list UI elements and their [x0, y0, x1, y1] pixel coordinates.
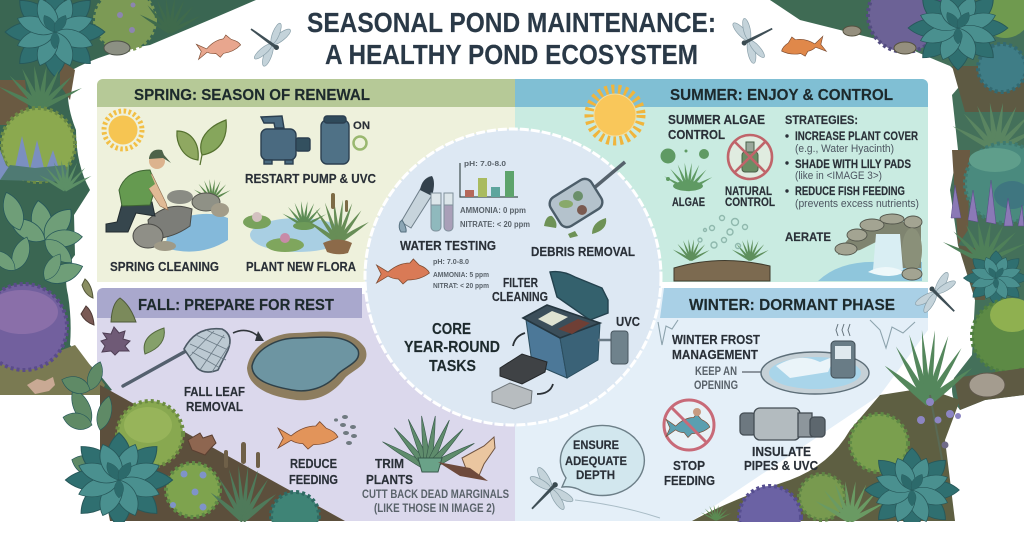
list: strategies: SHADE WITH LILY PADS: [795, 159, 911, 171]
illustration: new flora pond: [243, 193, 370, 254]
rocks: top right: [843, 26, 916, 54]
label: core year-round tasks: CORE: [432, 321, 471, 338]
title: [307, 7, 716, 70]
bush: lime right: [972, 298, 1024, 372]
lavender spikes: [0, 136, 70, 182]
label: core year-round tasks: [404, 321, 500, 375]
panel: core year-round tasks: [365, 129, 661, 425]
reeds: [209, 442, 277, 523]
rosette: top right: [908, 0, 1008, 70]
label: plant new flora: PLANT NEW FLORA: [246, 260, 356, 274]
label: winter frost management: [672, 333, 760, 362]
label: natural control: NATURAL: [725, 186, 772, 198]
flowers: lilac: [917, 395, 961, 470]
note: cut back dead marginals: (LIKE THOSE IN IMAGE 2): [374, 501, 495, 515]
bush: teal large: [965, 143, 1024, 223]
summer header band: [515, 79, 928, 107]
list: strategies: (e.g., Water Hyacinth): [795, 143, 894, 155]
leaves: tall stalk: [59, 360, 116, 478]
fern: lower left: [38, 160, 92, 192]
icon: no feeding sign: [664, 400, 714, 450]
icon: leaf net: [123, 329, 230, 386]
icon: header leaf: [111, 298, 136, 322]
rosette: bottom left: [65, 433, 173, 527]
callout: ensure adequate depth: ENSURE: [573, 438, 619, 452]
label: restart pump: RESTART PUMP & UVC: [245, 172, 376, 186]
on indicator: ON: [353, 120, 370, 132]
label: water testing: WATER TESTING: [400, 238, 496, 253]
soil: left: [0, 345, 105, 395]
arrow: net to pond: [233, 330, 260, 338]
icon: spring sun: [104, 111, 142, 149]
icon: green leaf: [144, 328, 164, 354]
fern: bottom: [814, 481, 886, 523]
label: core year-round tasks: TASKS: [429, 358, 476, 375]
bush: purple: [0, 284, 67, 370]
chart: water readings: pH: 7.0-8.0: [464, 159, 506, 168]
label: filter cleaning: FILTER: [503, 276, 538, 290]
icon: koi and readings: AMMONIA: 5 ppm: [433, 272, 489, 279]
grass: bottom right: [883, 330, 974, 406]
fall heading: FALL: PREPARE FOR REST: [138, 297, 334, 314]
icon: right koi: [779, 31, 827, 60]
label: reduce feeding: FEEDING: [289, 473, 338, 487]
label: keep an opening: KEEP AN: [695, 366, 737, 378]
illustration: waterfall: [818, 214, 922, 281]
icon: uvc unit: [598, 331, 628, 364]
icon: left dragonfly: [237, 10, 294, 69]
label: core year-round tasks: YEAR-ROUND: [404, 339, 500, 356]
icon: dark filter sponge: [500, 354, 547, 384]
illustration: trim plants: [381, 416, 495, 481]
label: fall leaf removal: FALL LEAF: [184, 385, 245, 399]
label: summer algae control: CONTROL: [668, 128, 725, 142]
note: cut back dead marginals: CUTT BACK DEAD MARGINALS: [362, 487, 509, 501]
icon: filter box: [523, 272, 608, 378]
title: A HEALTHY POND ECOSYSTEM: [325, 39, 698, 70]
label: debris removal: DEBRIS REMOVAL: [531, 244, 635, 259]
icon: koi and readings: NITRAT: < 20 ppm: [433, 283, 489, 290]
icon: winter dragonfly: [514, 464, 576, 526]
illustration: aeration bubbles: [672, 216, 770, 281]
bush: purple bottom: [739, 486, 801, 536]
icon: right dragonfly: [730, 8, 783, 66]
label: stop feeding: FEEDING: [664, 474, 715, 488]
label: insulate pipes: [744, 445, 818, 473]
panel: fall: [97, 288, 515, 521]
winter header band: [660, 288, 928, 318]
panel: winter: [514, 288, 928, 526]
icon: left koi: [196, 33, 242, 60]
bush: green corner: [979, 0, 1024, 38]
label: reduce feeding: REDUCE: [290, 457, 337, 471]
chart: water readings: AMMONIA: 0 ppm: [460, 206, 526, 215]
callout: ensure adequate depth: DEPTH: [576, 468, 615, 482]
illustration: spring cleaning gardener: [106, 150, 231, 252]
title: SEASONAL POND MAINTENANCE:: [307, 7, 716, 38]
chart: water readings: [460, 159, 530, 229]
illustration: pond: [247, 332, 366, 400]
rosette: bottom right: [865, 448, 959, 532]
bush: teal corner: [978, 44, 1024, 92]
foliage: left border: [0, 0, 256, 395]
label: reduce feeding: [289, 457, 338, 487]
label: summer algae control: [668, 113, 765, 142]
label: fall leaf removal: REMOVAL: [186, 400, 243, 414]
arrow: filter out: [513, 333, 525, 346]
rosette: top left: [5, 0, 105, 77]
icon: orange fish and food: [278, 415, 357, 449]
label: filter cleaning: [492, 276, 548, 304]
label: aerate: AERATE: [785, 230, 831, 244]
bush: lime bottom: [850, 414, 908, 472]
icon: header dragonfly: [912, 269, 971, 328]
grass: small: [700, 505, 732, 521]
icon: light filter sponge: [492, 383, 532, 409]
icon: koi and readings: pH: 7.0-8.0: [433, 259, 469, 266]
label: trim plants: [366, 457, 413, 487]
leaf: fallen: [27, 377, 55, 394]
label: uvc: UVC: [616, 315, 640, 329]
label: stop feeding: [664, 459, 715, 488]
summer heading: SUMMER: ENJOY & CONTROL: [670, 87, 893, 104]
icon: dropper: [399, 176, 434, 232]
label: natural control: CONTROL: [725, 197, 775, 209]
list: strategies: (prevents excess nutrients): [795, 198, 919, 210]
label: stop feeding: STOP: [673, 459, 705, 473]
foliage: light leaves: [0, 189, 86, 288]
icon: pump: [261, 116, 310, 164]
label: keep an opening: OPENING: [694, 380, 738, 392]
label: winter frost management: WINTER FROST: [672, 333, 760, 347]
label: insulate pipes: PIPES & UVC: [744, 459, 818, 473]
on indicator: [353, 120, 370, 150]
label: summer algae control: SUMMER ALGAE: [668, 113, 765, 127]
icon: test tubes: [431, 193, 453, 231]
winter heading: WINTER: DORMANT PHASE: [689, 297, 895, 314]
list: strategies: (like in <IMAGE 3>): [795, 170, 882, 182]
illustration: frozen pond with de-icer: [761, 324, 869, 394]
icon: summer sun: [589, 89, 641, 141]
spring heading: SPRING: SEASON OF RENEWAL: [134, 87, 370, 104]
rosette: right: [963, 251, 1024, 305]
label: spring cleaning: SPRING CLEANING: [110, 260, 219, 274]
cleanup below panel: [680, 522, 980, 536]
grass: right lower: [941, 222, 1024, 264]
list: strategies: [785, 113, 919, 210]
bush: blue flowers: [166, 463, 220, 517]
spring header band: [97, 79, 515, 107]
label: algae: ALGAE: [672, 197, 705, 209]
chart: water readings: NITRATE: < 20 ppm: [460, 220, 530, 229]
label: natural control: [725, 186, 775, 209]
foliage: bottom right: [680, 330, 980, 536]
arrow: filter in: [537, 384, 553, 394]
panel: summer: [515, 79, 928, 282]
label: keep an opening: [694, 366, 776, 392]
icon: maple leaf: [101, 327, 130, 355]
note: cut back dead marginals: [362, 487, 509, 515]
bush: flowering: [95, 0, 155, 50]
foliage: top right: [770, 0, 1024, 410]
bush: lime: [1, 108, 75, 182]
icon: algae: [660, 148, 713, 191]
label: fall leaf removal: [184, 385, 245, 414]
leaf: dry: [188, 433, 216, 455]
rock: [104, 41, 130, 55]
label: trim plants: TRIM: [375, 457, 404, 471]
foliage: falling leaves: [81, 279, 94, 325]
icon: koi and readings: [377, 259, 489, 290]
label: insulate pipes: INSULATE: [752, 445, 811, 459]
list: strategies: INCREASE PLANT COVER: [795, 131, 919, 143]
lavender: right: [951, 180, 1024, 226]
icon: two leaves: [177, 120, 226, 165]
icon: debris skimmer: [544, 162, 625, 238]
list: strategies: REDUCE FISH FEEDING: [795, 186, 905, 198]
bush: lime round: [117, 401, 183, 467]
callout: ensure adequate depth: ADEQUATE: [565, 454, 627, 468]
label: trim plants: PLANTS: [366, 473, 413, 487]
cleanup below panel: [110, 522, 360, 536]
fall header band: [97, 288, 362, 318]
grass: right: [951, 103, 1024, 153]
icon: uvc canister: [321, 116, 349, 164]
list: strategies: STRATEGIES:: [785, 113, 858, 127]
icon: insulated pipe: [740, 408, 825, 440]
soil: lower right: [954, 368, 1024, 410]
label: winter frost management: MANAGEMENT: [672, 348, 758, 362]
rock: right: [969, 373, 1005, 397]
bush: teal small: [271, 492, 319, 536]
icon: no chemicals sign: [728, 135, 772, 179]
bush: green bottom: [799, 474, 845, 520]
panel: spring: [97, 79, 515, 282]
bush: purple top: [868, 0, 942, 52]
callout: ensure adequate depth: [560, 425, 644, 495]
grass: left: [0, 66, 83, 110]
label: filter cleaning: CLEANING: [492, 290, 548, 304]
grass: top left: [139, 0, 202, 34]
icicles: [658, 320, 915, 348]
foliage: bottom left: [59, 360, 360, 536]
